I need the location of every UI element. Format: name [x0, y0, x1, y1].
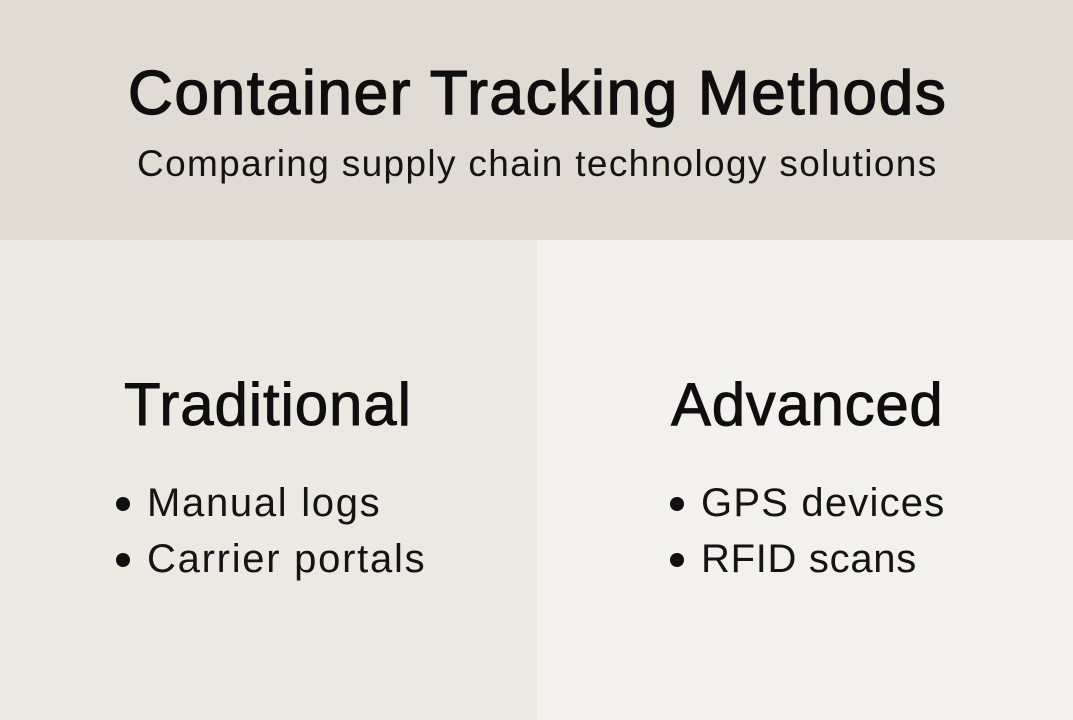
bullet: gps devices: GPS devices	[701, 481, 945, 525]
heading: traditional: Traditional	[124, 371, 412, 438]
list: advanced methods	[670, 481, 945, 581]
panel: advanced	[537, 240, 1073, 720]
subtitle: Comparing supply chain technology solutions	[137, 143, 938, 184]
panel: traditional	[0, 240, 537, 720]
bullet: rfid scans: RFID scans	[701, 537, 917, 581]
list: traditional methods	[116, 481, 426, 581]
bullet: carrier portals: Carrier portals	[147, 537, 426, 581]
title: Container Tracking Methods	[128, 59, 948, 128]
header band	[0, 0, 1073, 240]
bullet: manual logs: Manual logs	[147, 481, 381, 525]
heading: advanced: Advanced	[671, 371, 943, 438]
